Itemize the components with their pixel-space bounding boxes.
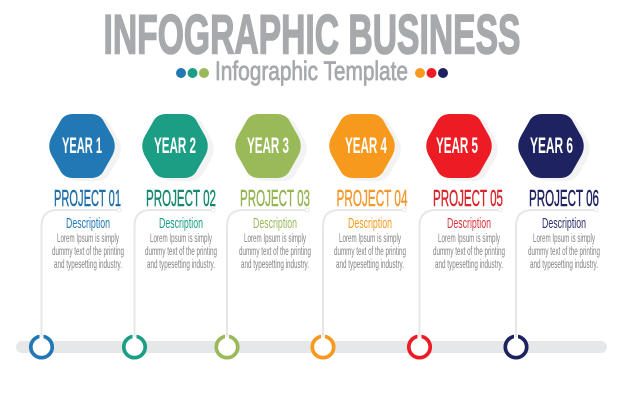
description 1: dummy text of the printing xyxy=(52,246,124,258)
hexagon badge 6: YEAR 6 xyxy=(530,133,573,158)
hexagon badge 2: YEAR 2 xyxy=(154,133,196,158)
description 3 xyxy=(239,216,311,271)
hexagon badge 3 xyxy=(235,114,307,181)
timeline ring 4 xyxy=(312,330,334,358)
description 2: Description xyxy=(159,216,203,232)
description 2: Lorem Ipsum is simply xyxy=(150,233,212,245)
hexagon badge 6 xyxy=(518,114,590,181)
description 3: dummy text of the printing xyxy=(239,246,311,258)
hexagon badge 4: YEAR 4 xyxy=(345,133,387,158)
hexagon badge 1 xyxy=(49,114,121,181)
panel: year 2 xyxy=(124,114,217,358)
hexagon badge 1: YEAR 1 xyxy=(62,133,102,158)
subtitle row xyxy=(176,56,448,86)
timeline ring 3 xyxy=(216,330,238,358)
description 5: dummy text of the printing xyxy=(433,246,505,258)
panel: year 5 xyxy=(409,114,505,358)
timeline ring 5 xyxy=(409,330,430,358)
connector line 1 xyxy=(42,208,121,336)
description 1 xyxy=(52,216,124,271)
description 1: Description xyxy=(66,216,110,232)
description 2: dummy text of the printing xyxy=(145,246,217,258)
description 3: and typesetting industry. xyxy=(241,259,309,271)
description 2: and typesetting industry. xyxy=(147,259,215,271)
description 4: Lorem Ipsum is simply xyxy=(339,233,401,245)
connector line 3 xyxy=(227,208,309,336)
description 4: Description xyxy=(348,216,392,232)
project heading 2: PROJECT 02 xyxy=(146,185,216,211)
hexagon badge 5: YEAR 5 xyxy=(436,133,478,158)
description 4 xyxy=(334,216,406,271)
description 4: dummy text of the printing xyxy=(334,246,406,258)
hexagon badge 5 xyxy=(426,114,498,181)
subtitle: Infographic Template xyxy=(215,56,408,86)
connector line 4 xyxy=(323,208,406,336)
panel: year 4 xyxy=(312,114,408,358)
hexagon badge 4 xyxy=(329,114,401,181)
panel: year 6 xyxy=(505,114,600,358)
description 2 xyxy=(145,216,217,271)
description 5: Lorem Ipsum is simply xyxy=(438,233,500,245)
timeline ring 2 xyxy=(124,330,145,358)
description 6 xyxy=(528,216,600,271)
description 3: Description xyxy=(253,216,297,232)
panel: year 3 xyxy=(216,114,311,358)
description 6: Description xyxy=(542,216,586,232)
hexagon badge 2 xyxy=(142,114,214,181)
description 1: Lorem Ipsum is simply xyxy=(57,233,119,245)
project heading 4: PROJECT 04 xyxy=(336,185,408,211)
description 5: Description xyxy=(447,216,491,232)
connector line 2 xyxy=(134,208,215,336)
panel: year 1: PROJECT 01 xyxy=(54,185,121,211)
description 4: and typesetting industry. xyxy=(336,259,404,271)
description 1: and typesetting industry. xyxy=(54,259,122,271)
project heading 5: PROJECT 05 xyxy=(433,185,503,211)
hexagon badge 3: YEAR 3 xyxy=(247,133,289,158)
description 3: Lorem Ipsum is simply xyxy=(244,233,306,245)
timeline ring 6 xyxy=(505,330,527,358)
panel: year 1 xyxy=(31,114,124,358)
description 5 xyxy=(433,216,505,271)
timeline ring 1 xyxy=(31,330,52,358)
left dots xyxy=(176,68,209,78)
project heading 3: PROJECT 03 xyxy=(240,185,310,211)
connector line 5 xyxy=(420,208,502,336)
timeline bar xyxy=(16,341,607,353)
connector line 6 xyxy=(516,208,598,336)
right dots xyxy=(415,68,448,78)
description 5: and typesetting industry. xyxy=(435,259,503,271)
